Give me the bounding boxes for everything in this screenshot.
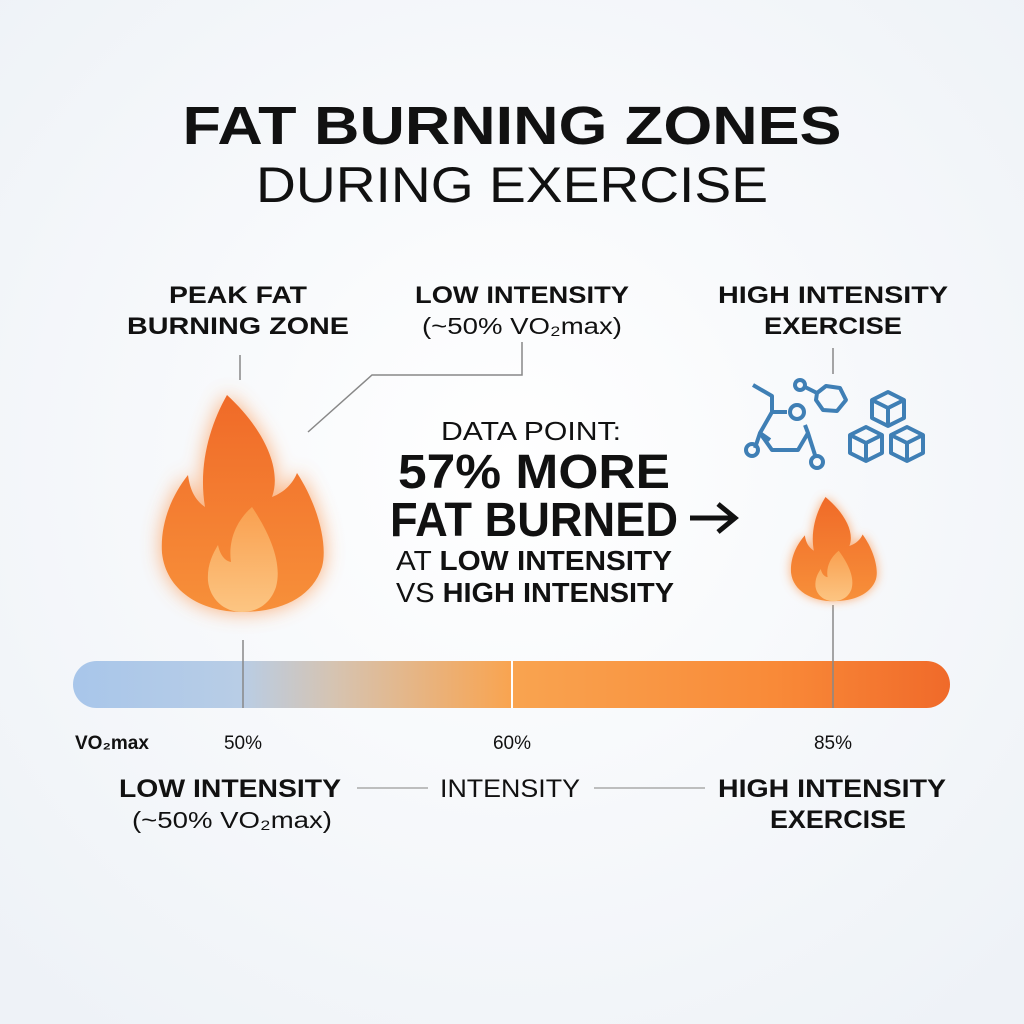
- axis labels: 60%: [493, 733, 531, 754]
- axis labels: 50%: [224, 733, 262, 754]
- label: low intensity: (~50% VO₂max): [422, 313, 622, 339]
- axis labels: VO₂max: [75, 733, 149, 754]
- bottom: low intensity: [119, 775, 341, 833]
- title: FAT BURNING ZONES: [182, 96, 842, 156]
- axis labels: [75, 733, 852, 754]
- bottom: low intensity: LOW INTENSITY: [119, 775, 341, 803]
- title: DURING EXERCISE: [256, 157, 768, 213]
- icon: large flame: [162, 395, 324, 612]
- bottom: intensity axis label: INTENSITY: [440, 775, 580, 803]
- callout: data point: VS HIGH INTENSITY: [396, 577, 674, 608]
- label: peak fat burning zone: BURNING ZONE: [127, 313, 349, 340]
- axis labels: 85%: [814, 733, 852, 754]
- label: low intensity: [415, 282, 629, 339]
- label: high intensity exercise: [718, 282, 948, 340]
- callout: data point: FAT BURNED: [390, 494, 678, 547]
- intensity gradient bar: [73, 661, 950, 708]
- label: low intensity: LOW INTENSITY: [415, 282, 629, 309]
- connector lines: [240, 342, 833, 708]
- bottom: high intensity exercise: [718, 775, 946, 834]
- label: high intensity exercise: EXERCISE: [764, 313, 902, 340]
- bottom: high intensity exercise: EXERCISE: [770, 806, 906, 834]
- label: peak fat burning zone: [127, 282, 349, 340]
- label: peak fat burning zone: PEAK FAT: [169, 282, 307, 309]
- callout: data point: AT LOW INTENSITY: [396, 545, 672, 576]
- callout: data point: DATA POINT:: [441, 416, 621, 446]
- icon: molecules and cubes: [746, 380, 923, 468]
- icon: small flame: [791, 497, 877, 601]
- bottom: high intensity exercise: HIGH INTENSITY: [718, 775, 946, 803]
- title: [182, 96, 842, 213]
- callout: data point: 57% MORE: [398, 446, 670, 499]
- bottom: low intensity: (~50% VO₂max): [132, 807, 332, 833]
- label: high intensity exercise: HIGH INTENSITY: [718, 282, 948, 309]
- callout: data point: [390, 416, 735, 608]
- arrow: [690, 504, 735, 532]
